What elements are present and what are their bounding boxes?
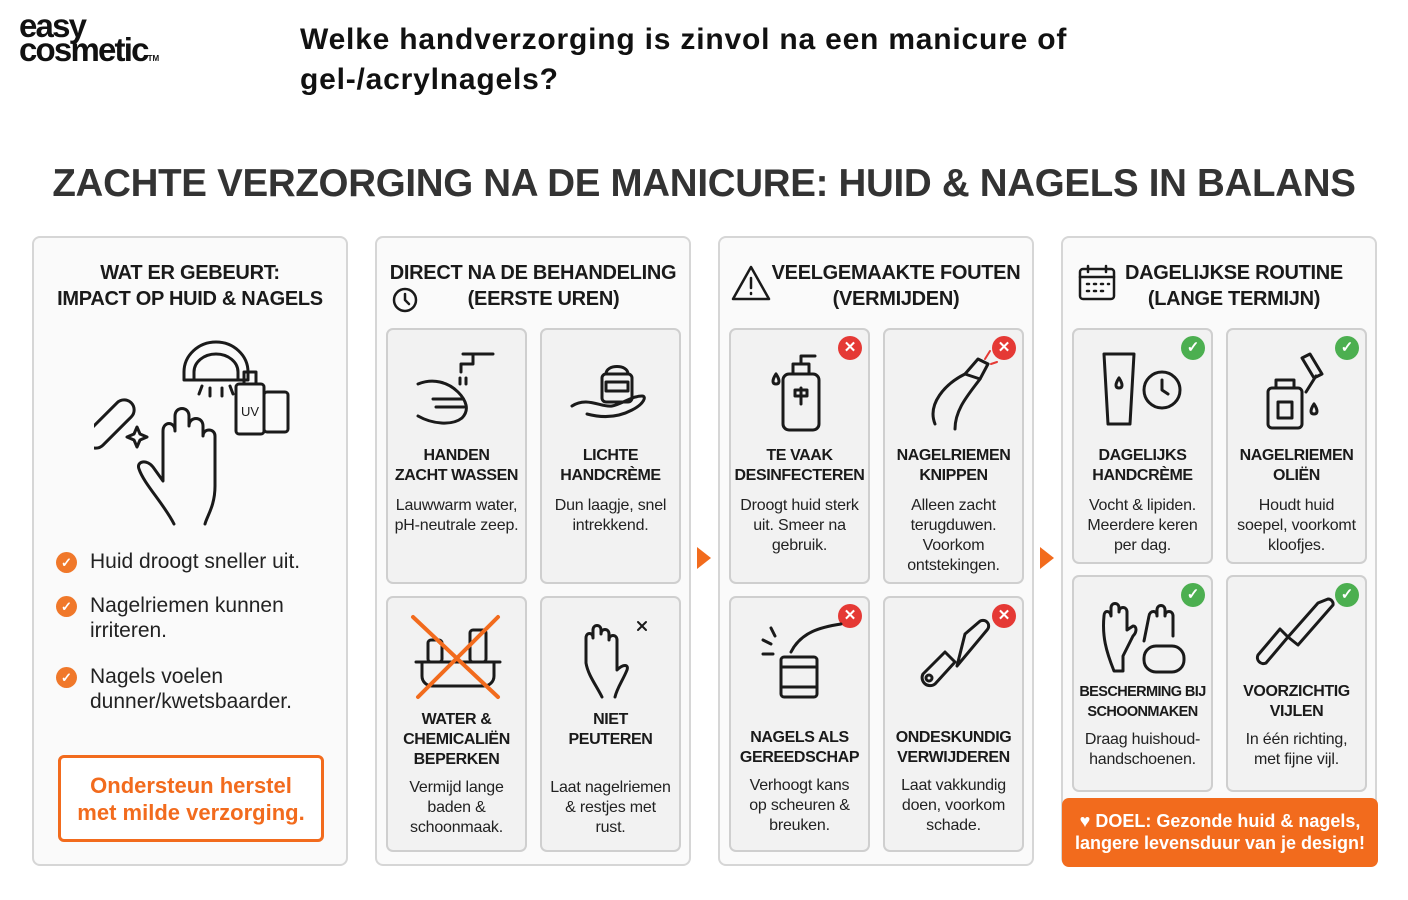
panel heading: (EERSTE UREN) [468,288,619,310]
card: nagels als gereedschap: NAGELS ALS [750,729,849,746]
card: nagelriemen olien: kloofjes. [1268,537,1325,554]
bullet list: Nagels voelen [90,665,223,688]
panel heading: (VERMIJDEN) [833,288,959,310]
card: nagelriemen olien [1226,328,1367,564]
card: handen zacht wassen [386,328,527,584]
panel: dagelijkse routine [1061,236,1377,866]
card: water en chemicalien beperken: schoonmaak. [410,819,503,836]
card: nagelriemen olien: OLIËN [1273,467,1320,484]
card: nagelriemen knippen: Voorkom [923,537,984,554]
card: ondeskundig verwijderen: VERWIJDEREN [897,749,1010,766]
bullet list: ✓ [61,670,72,685]
question heading [300,23,1067,96]
goal banner: ♥ DOEL: Gezonde huid & nagels, [1080,811,1360,831]
card: ondeskundig verwijderen: ONDESKUNDIG [896,729,1011,746]
card: nagelriemen knippen: NAGELRIEMEN [897,447,1010,464]
card: voorzichtig vijlen: In één richting, [1246,731,1347,748]
logo: easy [19,7,85,44]
card: handen zacht wassen: pH-neutrale zeep. [395,517,518,534]
card: nagelriemen olien: NAGELRIEMEN [1240,447,1353,464]
icon: hand with lamp, file and bottles [94,340,290,526]
card: water en chemicalien beperken: CHEMICALIËN [403,731,510,748]
card: voorzichtig vijlen: VIJLEN [1270,703,1323,720]
card: nagelriemen knippen: ontstekingen. [907,557,1000,574]
card: nagelriemen knippen: KNIPPEN [919,467,988,484]
card: te vaak desinfecteren: ✕ [844,339,856,356]
panel: veelgemaakte fouten [718,236,1034,866]
card: lichte handcreme: Dun laagje, snel [555,497,666,514]
question heading: Welke handverzorging is zinvol na een manicure of [300,23,1067,56]
card: lichte handcreme [540,328,681,584]
card: te vaak desinfecteren: DESINFECTEREN [735,467,864,484]
panel: direct na de behandeling [375,236,691,866]
card: te vaak desinfecteren: TE VAAK [766,447,833,464]
card: nagels als gereedschap: ✕ [844,607,856,624]
card: niet peuteren: NIET [593,711,628,728]
callout [58,755,324,842]
panel heading: IMPACT OP HUID & NAGELS [57,288,323,310]
card: ondeskundig verwijderen: schade. [926,817,981,834]
bullet list: Huid droogt sneller uit. [90,550,300,573]
card: ondeskundig verwijderen [883,596,1024,852]
card: nagelriemen olien: Houdt huid [1259,497,1334,514]
card: nagelriemen knippen: terugduwen. [911,517,996,534]
card: lichte handcreme: LICHTE [583,447,638,464]
card: niet peuteren: rust. [595,819,626,836]
card: te vaak desinfecteren: uit. Smeer na [753,517,846,534]
card: nagelriemen knippen: ✕ [998,339,1010,356]
arrow: to fouten [697,547,711,569]
panel heading: DIRECT NA DE BEHANDELING [390,262,676,284]
panel heading: WAT ER GEBEURT: [100,262,280,284]
card: handen zacht wassen: ZACHT WASSEN [395,467,518,484]
panel heading: DAGELIJKSE ROUTINE [1125,262,1343,284]
card: voorzichtig vijlen: ✓ [1341,586,1353,603]
card: nagelriemen olien: ✓ [1341,339,1353,356]
card: ondeskundig verwijderen: ✕ [998,607,1010,624]
card: te vaak desinfecteren [729,328,870,584]
icon: warning [732,266,770,300]
goal banner: langere levensduur van je design! [1075,833,1365,853]
card: handen zacht wassen: HANDEN [423,447,490,464]
card: nagels als gereedschap: GEREEDSCHAP [740,749,859,766]
panel heading [1125,262,1343,310]
card: voorzichtig vijlen: met fijne vijl. [1254,751,1339,768]
card: ondeskundig verwijderen: doen, voorkom [902,797,1005,814]
card: handen zacht wassen: Lauwwarm water, [396,497,517,514]
panel: wat er gebeurt [32,236,348,866]
card: lichte handcreme: intrekkend. [572,517,649,534]
logo [19,7,159,68]
card: bescherming bij schoonmaken: handschoenen. [1089,751,1196,768]
callout: Ondersteun herstel [90,773,292,798]
callout: met milde verzorging. [77,800,305,825]
bullet list: dunner/kwetsbaarder. [90,690,292,713]
card: dagelijks handcreme: HANDCRÈME [1092,467,1193,484]
icon: hand with lamp, file and bottles: UV [241,404,259,419]
card: dagelijks handcreme: ✓ [1187,339,1199,356]
card: dagelijks handcreme: DAGELIJKS [1098,447,1186,464]
bullet list: ✓ [61,555,72,570]
card: bescherming bij schoonmaken: SCHOONMAKEN [1087,704,1198,720]
icon: clock [392,288,418,312]
card: water en chemicalien beperken: baden & [427,799,486,816]
card: bescherming bij schoonmaken [1072,575,1213,792]
card: te vaak desinfecteren: Droogt huid sterk [740,497,859,514]
card: lichte handcreme: HANDCRÈME [560,467,661,484]
bullet list [56,550,300,713]
logo: cosmeticTM [19,31,159,68]
card: niet peuteren: & restjes met [565,799,656,816]
card: nagelriemen olien: soepel, voorkomt [1237,517,1356,534]
card: ondeskundig verwijderen: Laat vakkundig [901,777,1006,794]
card: water en chemicalien beperken: BEPERKEN [414,751,499,768]
card: bescherming bij schoonmaken: Draag huishoud- [1085,731,1200,748]
icon: calendar [1078,264,1116,300]
card: te vaak desinfecteren: gebruik. [772,537,827,554]
card: voorzichtig vijlen: VOORZICHTIG [1243,683,1350,700]
card: dagelijks handcreme: Vocht & lipiden. [1089,497,1196,514]
bullet list: ✓ [61,599,72,614]
bullet list: Nagelriemen kunnen [90,594,284,617]
card: nagels als gereedschap [729,596,870,852]
panel heading [390,262,676,310]
card: voorzichtig vijlen [1226,575,1367,792]
card: nagels als gereedschap: Verhoogt kans [750,777,849,794]
card: nagels als gereedschap: op scheuren & [749,797,850,814]
card: dagelijks handcreme: per dag. [1114,537,1171,554]
card: bescherming bij schoonmaken: ✓ [1187,586,1199,603]
card: niet peuteren: PEUTEREN [569,731,652,748]
card: bescherming bij schoonmaken: BESCHERMING BIJ [1079,684,1206,700]
panel heading: (LANGE TERMIJN) [1148,288,1320,310]
card: nagelriemen knippen [883,328,1024,584]
card: nagelriemen knippen: Alleen zacht [911,497,996,514]
arrow: to routine [1040,547,1054,569]
panel heading: VEELGEMAAKTE FOUTEN [772,262,1020,284]
card: nagels als gereedschap: breuken. [769,817,830,834]
card: dagelijks handcreme [1072,328,1213,564]
card: water en chemicalien beperken: Vermijd lange [409,779,504,796]
card: niet peuteren: Laat nagelriemen [550,779,671,796]
main title: ZACHTE VERZORGING NA DE MANICURE: HUID & NAGELS IN BALANS [52,162,1356,205]
bullet list: irriteren. [90,619,167,642]
panel heading [772,262,1020,310]
panel heading [57,262,323,310]
question heading: gel-/acrylnagels? [300,63,559,96]
card: niet peuteren [540,596,681,852]
card: water en chemicalien beperken [386,596,527,852]
card: dagelijks handcreme: Meerdere keren [1087,517,1198,534]
card: water en chemicalien beperken: WATER & [422,711,491,728]
goal banner [1062,798,1378,867]
